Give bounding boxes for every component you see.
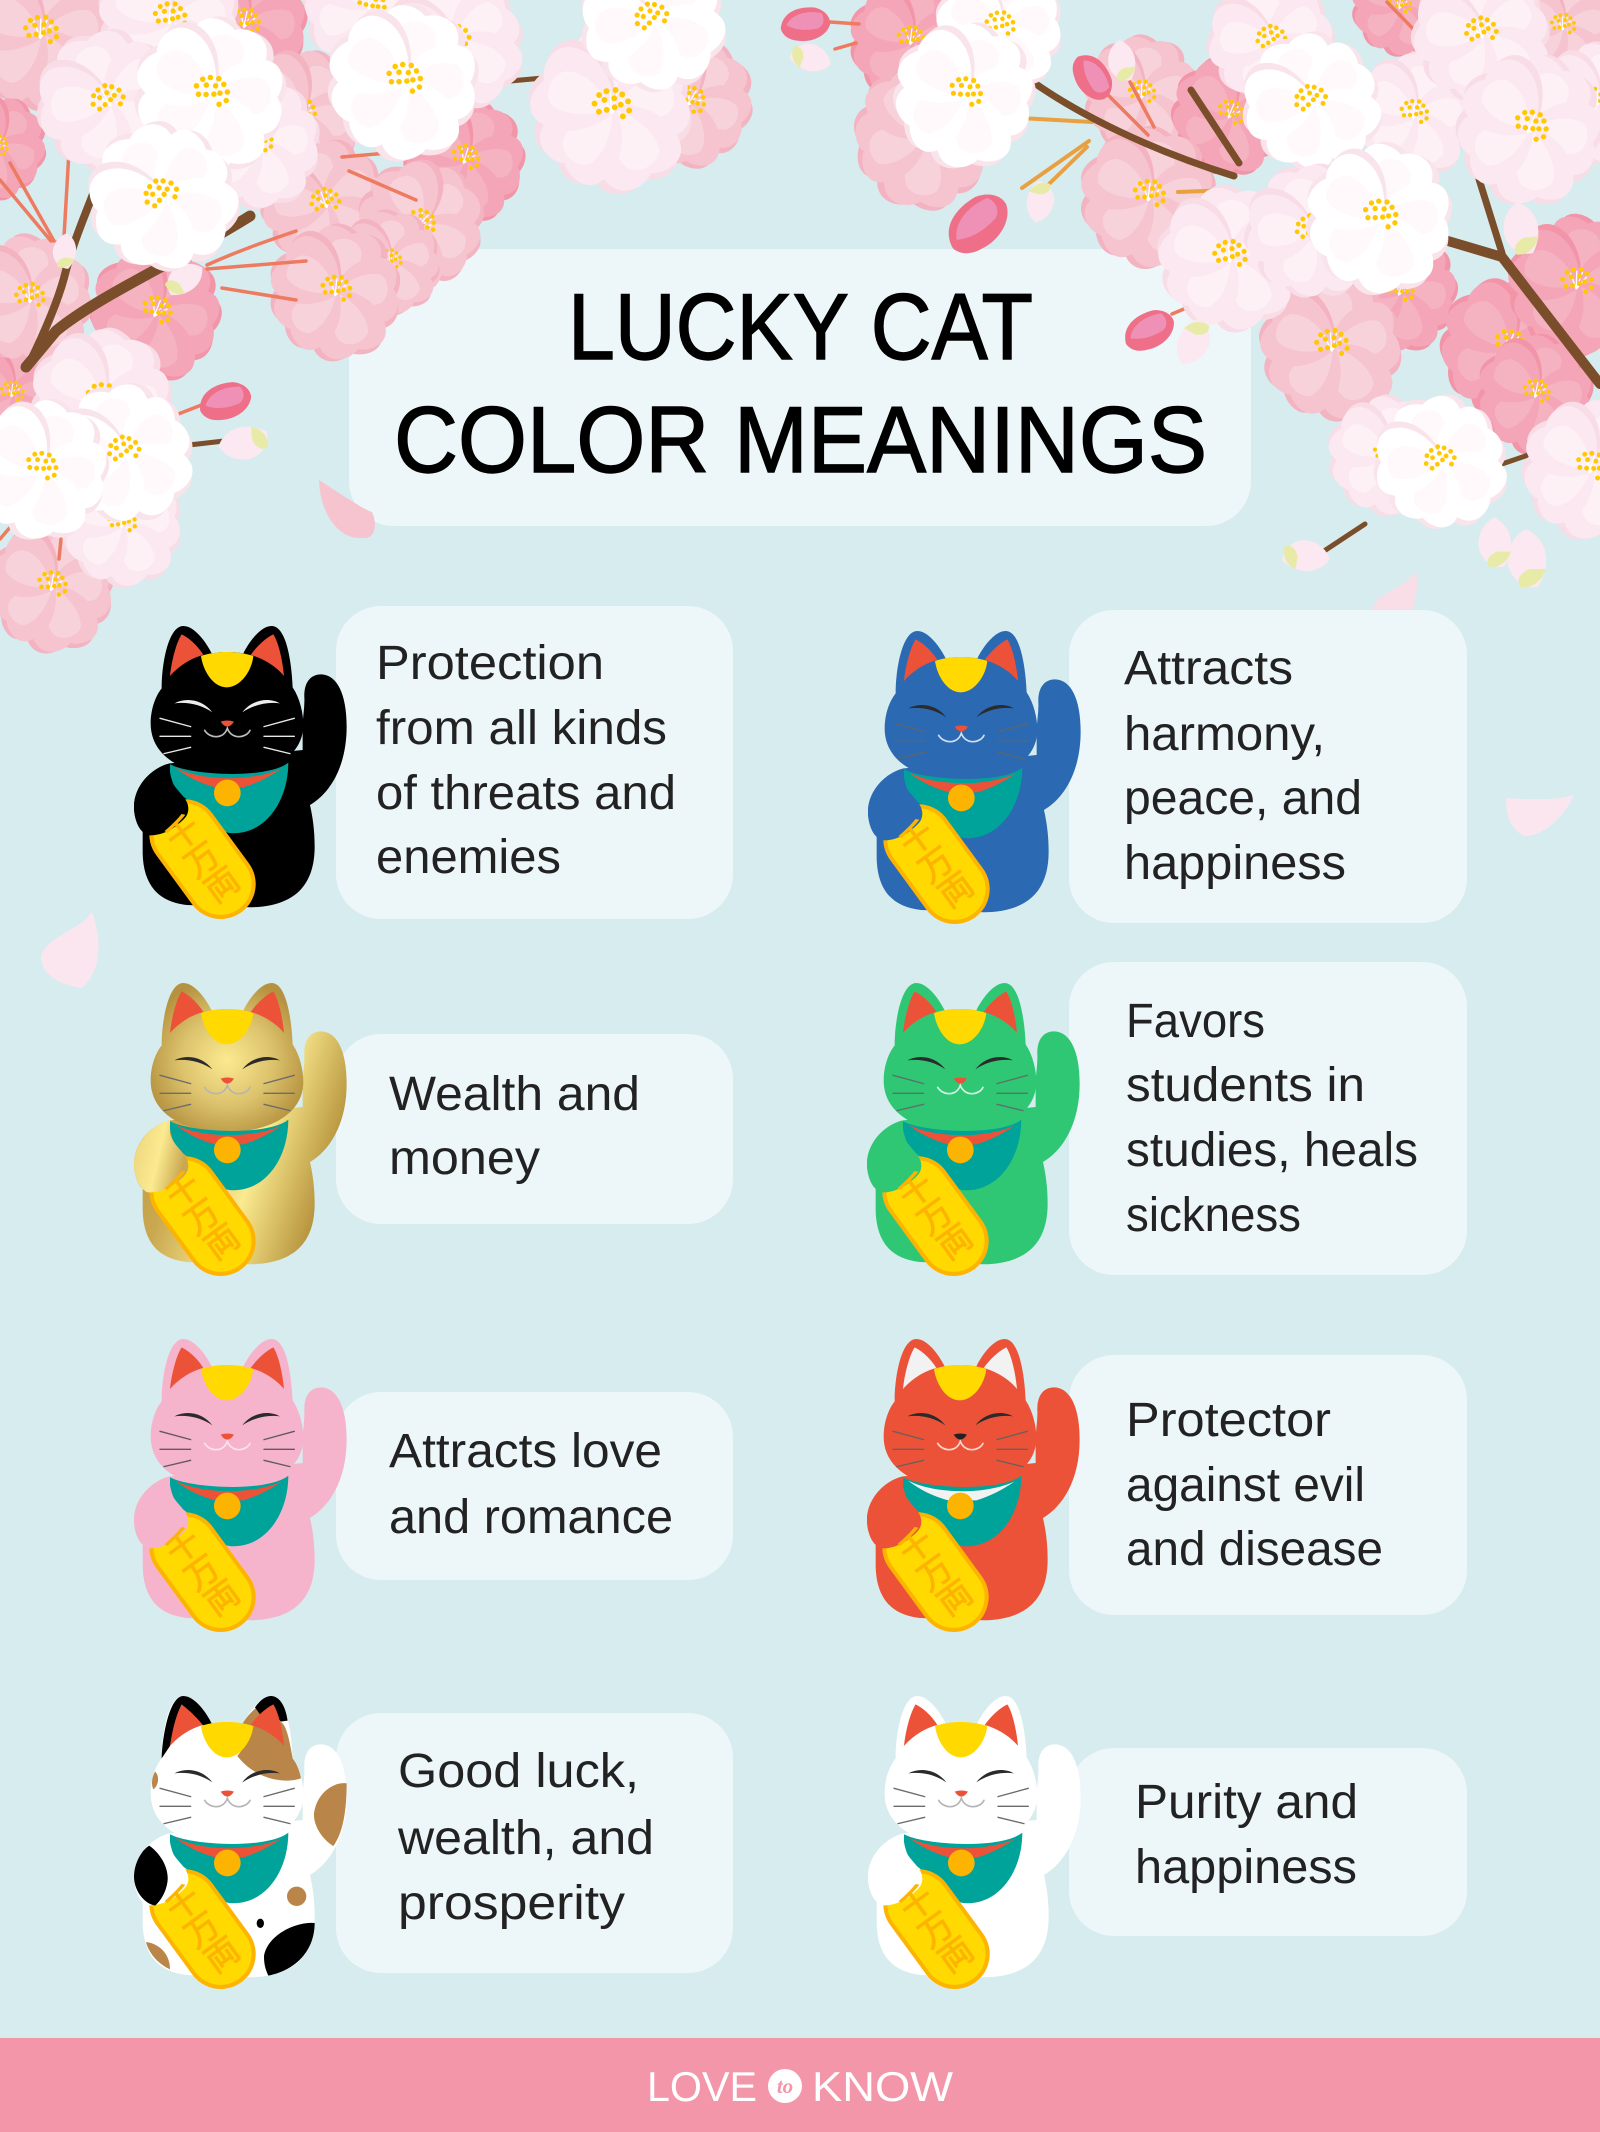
cat: blue: 千 — [893, 814, 942, 864]
card: green cat meaning: sickness — [1126, 1189, 1301, 1242]
cat: blue: 両 — [932, 866, 981, 916]
cat: calico: 万 — [178, 1906, 227, 1956]
flower bud: pink — [195, 377, 255, 425]
card: gold cat meaning: money — [389, 1132, 540, 1185]
card: blue cat meaning: Attracts — [1124, 642, 1293, 695]
card: red cat meaning — [1069, 1355, 1467, 1615]
cat: red: 万 — [911, 1549, 960, 1599]
cat: green: 両 — [931, 1218, 980, 1268]
card: blue cat meaning: harmony, — [1124, 708, 1325, 761]
footer logo — [647, 2063, 953, 2110]
card: black cat meaning — [336, 606, 733, 919]
card: gold cat meaning: Wealth and — [389, 1068, 640, 1121]
cat: white: 千 — [893, 1879, 942, 1929]
footer logo: LOVE — [647, 2063, 757, 2110]
panel: gold cat — [134, 983, 733, 1290]
title: LUCKY CAT — [568, 274, 1033, 379]
card: gold cat meaning — [336, 1034, 733, 1224]
cat: calico: 両 — [198, 1931, 247, 1981]
flower buds — [779, 6, 1546, 587]
cat: gold: 千 — [159, 1166, 208, 1216]
cherry blossom branch: top left — [0, 0, 789, 686]
card: calico cat meaning: wealth, and — [397, 1812, 654, 1865]
card: black cat meaning: of threats and — [376, 767, 676, 820]
cat: black: 万 — [178, 836, 227, 886]
card: calico cat meaning — [336, 1713, 733, 1973]
falling petal — [41, 912, 99, 988]
cat: green: 千 — [892, 1166, 941, 1216]
cat: pink: 両 — [198, 1574, 247, 1624]
flower bud: white — [217, 425, 269, 462]
cat: white: 万 — [912, 1906, 961, 1956]
cat: calico — [134, 1696, 347, 2003]
cat: green — [867, 983, 1080, 1290]
card: red cat meaning: Protector — [1126, 1394, 1331, 1447]
cat: green: 万 — [911, 1193, 960, 1243]
footer band — [0, 2038, 1600, 2132]
cat: blue: 万 — [912, 841, 961, 891]
card: black cat meaning: Protection — [376, 637, 604, 690]
card: pink cat meaning: and romance — [389, 1491, 673, 1544]
panel: calico cat — [134, 1696, 733, 2003]
calico patches — [134, 1696, 347, 1976]
card: green cat meaning: Favors — [1126, 995, 1265, 1048]
footer logo: KNOW — [812, 2063, 953, 2110]
falling petal — [1506, 795, 1574, 836]
cat: pink — [134, 1339, 347, 1646]
panel: white cat — [868, 1696, 1467, 2003]
card: green cat meaning: students in — [1126, 1059, 1365, 1112]
branches: left — [0, 78, 543, 559]
cat: pink: 万 — [178, 1549, 227, 1599]
cat: pink: 千 — [159, 1522, 208, 1572]
card: calico cat meaning: prosperity — [398, 1877, 625, 1930]
footer logo: to — [777, 2074, 793, 2098]
cat: gold — [134, 983, 347, 1290]
cat: black: 千 — [159, 809, 208, 859]
card: pink cat meaning: Attracts love — [389, 1425, 662, 1478]
panel: green cat — [867, 962, 1467, 1290]
card: blue cat meaning: happiness — [1124, 837, 1346, 890]
card: pink cat meaning — [336, 1392, 733, 1580]
title: COLOR MEANINGS — [394, 387, 1207, 492]
cat: black — [134, 626, 347, 933]
cat: red — [867, 1339, 1080, 1646]
title — [394, 274, 1207, 492]
cat: gold: 万 — [178, 1193, 227, 1243]
cat: gold: 両 — [198, 1218, 247, 1268]
falling petal — [1371, 571, 1417, 637]
card: black cat meaning: enemies — [376, 831, 561, 884]
card: white cat meaning: Purity and — [1135, 1776, 1358, 1829]
cat: calico: 千 — [159, 1879, 208, 1929]
card: green cat meaning: studies, heals — [1126, 1124, 1418, 1177]
cat: red: 千 — [892, 1522, 941, 1572]
title panel — [349, 249, 1251, 526]
panel: pink cat — [134, 1339, 733, 1646]
card: green cat meaning — [1069, 962, 1467, 1275]
card: black cat meaning: from all kinds — [376, 702, 667, 755]
card: white cat meaning: happiness — [1135, 1841, 1357, 1894]
cat: white — [868, 1696, 1081, 2003]
branches: right — [830, 2, 1600, 559]
cherry blossom branch: top right — [779, 0, 1600, 587]
cat: white: 両 — [932, 1931, 981, 1981]
falling petal — [319, 480, 375, 538]
card: red cat meaning: against evil — [1126, 1459, 1365, 1512]
panel: red cat — [867, 1339, 1467, 1646]
card: blue cat meaning: peace, and — [1124, 772, 1362, 825]
cat: black: 両 — [198, 861, 247, 911]
panel: blue cat — [868, 610, 1467, 938]
card: blue cat meaning — [1069, 610, 1467, 923]
cat: red: 両 — [931, 1574, 980, 1624]
cat: blue — [868, 631, 1081, 938]
card: calico cat meaning: Good luck, — [398, 1745, 639, 1798]
card: red cat meaning: and disease — [1126, 1523, 1383, 1576]
card: white cat meaning — [1069, 1748, 1467, 1936]
panel: black cat — [134, 606, 733, 933]
